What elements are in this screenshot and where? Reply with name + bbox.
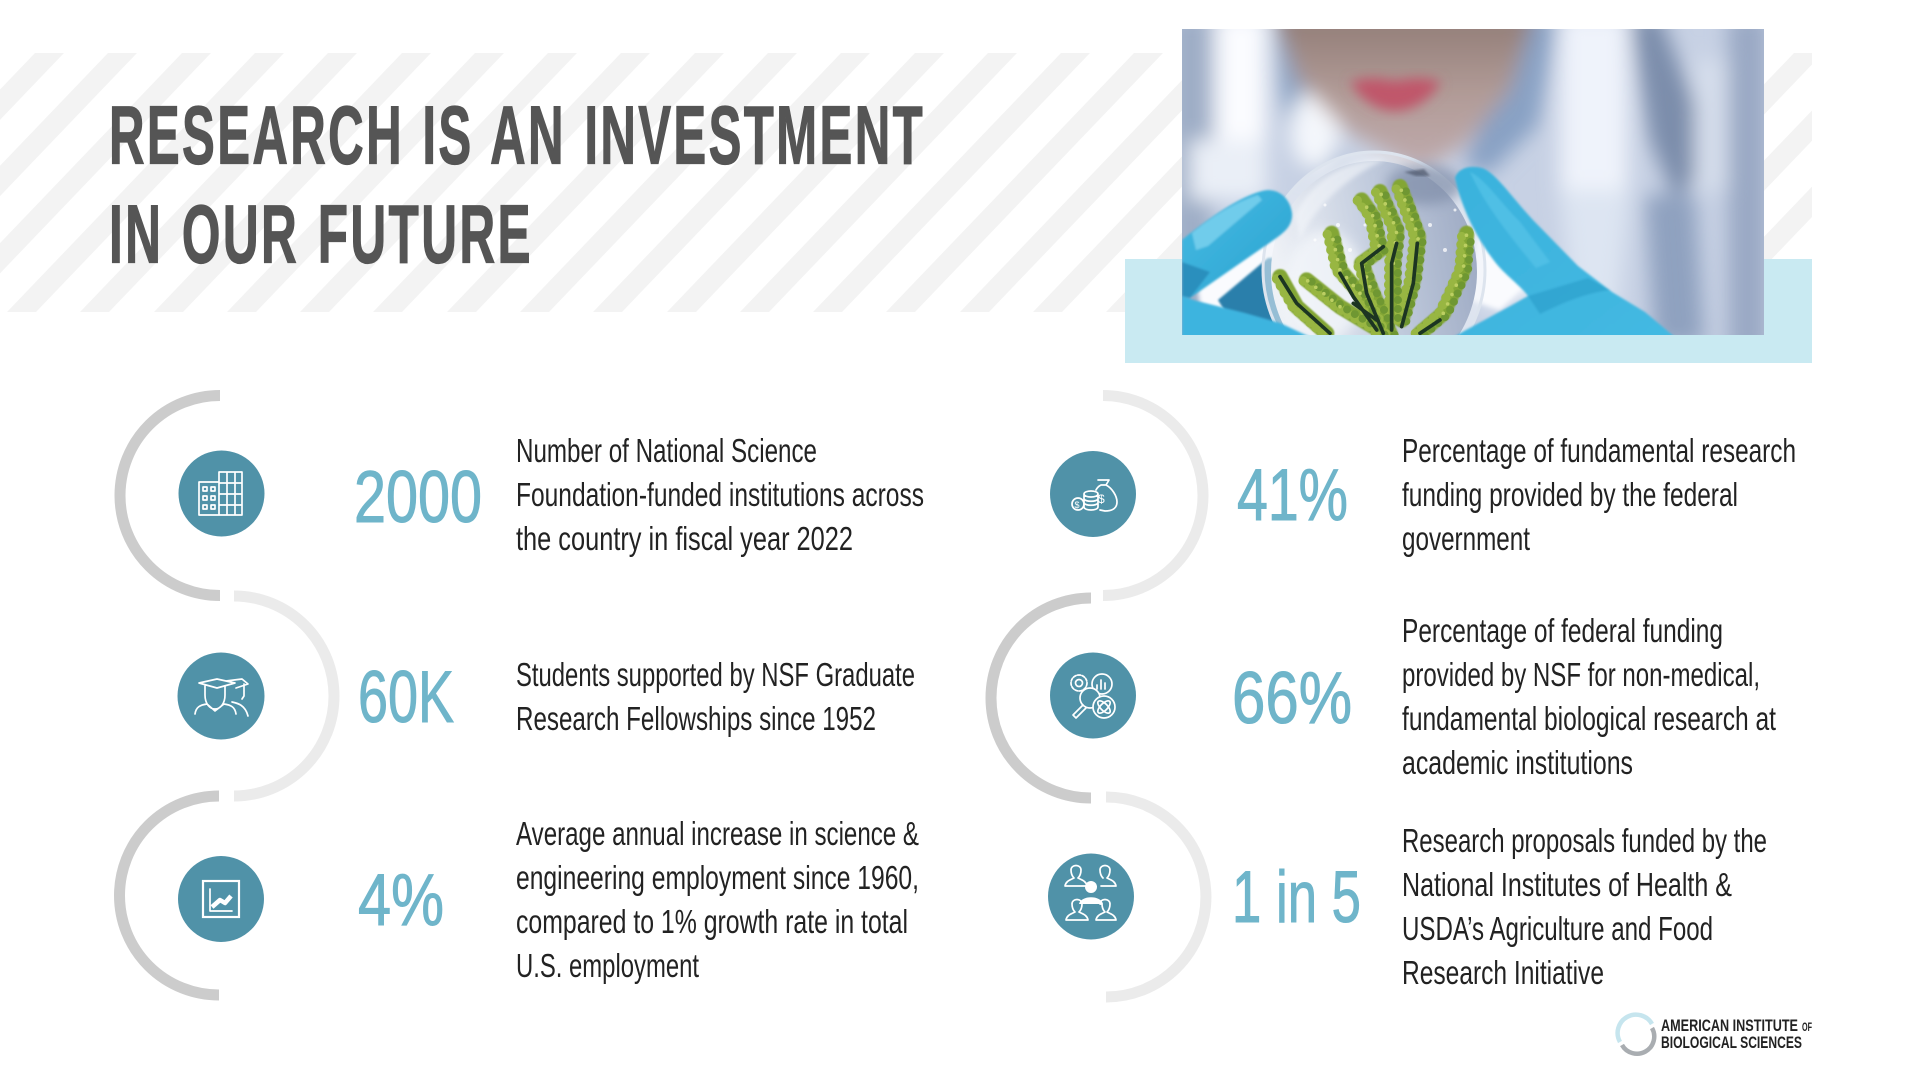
description: NSF share of biology funding: Percentage of federal funding bbox=[1402, 612, 1723, 649]
icon: growth chart bbox=[178, 856, 264, 942]
right glove bbox=[1452, 167, 1676, 338]
diagonal stripe banner bbox=[0, 53, 1920, 312]
description: NSF share of biology funding bbox=[1402, 612, 1776, 781]
logo: American Institute of Biological Sciences: AMERICAN INSTITUTE bbox=[1661, 1016, 1798, 1035]
description: employment growth: engineering employment since 1960, bbox=[516, 859, 919, 896]
logo: American Institute of Biological Sciences: BIOLOGICAL SCIENCES bbox=[1661, 1033, 1802, 1052]
icon: graduates bbox=[178, 652, 264, 740]
description: NSF share of biology funding: academic institutions bbox=[1402, 744, 1633, 781]
plant bbox=[1275, 187, 1471, 335]
description: NSF institutions: Number of National Science bbox=[516, 432, 817, 469]
lips bbox=[1350, 78, 1441, 111]
description: funded proposals: Research Initiative bbox=[1402, 954, 1604, 991]
icon: research gear chart magnifier atom bbox=[1050, 652, 1136, 738]
title: IN OUR FUTURE bbox=[109, 188, 533, 280]
description: funded proposals bbox=[1402, 822, 1767, 991]
title: RESEARCH IS AN INVESTMENT bbox=[109, 88, 925, 182]
description: NSF institutions bbox=[516, 432, 924, 557]
description: employment growth bbox=[516, 815, 919, 984]
connector arcs: right column bbox=[991, 396, 1206, 997]
description: graduate fellowships: Research Fellowships since 1952 bbox=[516, 700, 876, 737]
logo: American Institute of Biological Sciences bbox=[1618, 1015, 1812, 1054]
description: fundamental research funding: funding provided by the federal bbox=[1402, 476, 1738, 513]
description: fundamental research funding: Percentage of fundamental research bbox=[1402, 432, 1796, 469]
description: graduate fellowships bbox=[516, 656, 915, 737]
description: NSF share of biology funding: fundamental biological research at bbox=[1402, 700, 1776, 737]
description: employment growth: U.S. employment bbox=[516, 947, 699, 984]
logo: American Institute of Biological Sciences: OF bbox=[1802, 1020, 1812, 1034]
description: NSF share of biology funding: provided by NSF for non-medical, bbox=[1402, 656, 1760, 693]
icon: money bag and coins bbox=[1050, 451, 1136, 537]
white lab coat behind hands bbox=[1196, 238, 1520, 311]
photo: scientist holding petri dish with green plant bbox=[1182, 29, 1764, 335]
left glove bbox=[1182, 190, 1310, 337]
back of left hand bbox=[1216, 256, 1284, 326]
icon: team network bbox=[1048, 854, 1134, 940]
icon: buildings bbox=[178, 450, 264, 536]
description: NSF institutions: Foundation-funded institutions across bbox=[516, 476, 924, 513]
description: fundamental research funding: government bbox=[1402, 520, 1530, 557]
light blue band behind photo bbox=[1125, 259, 1812, 363]
icon: money bag and coins: $ bbox=[1098, 492, 1105, 506]
connector arcs: left column bbox=[119, 396, 334, 995]
description: NSF institutions: the country in fiscal year 2022 bbox=[516, 520, 853, 557]
icon: money bag and coins: $ bbox=[1074, 500, 1080, 510]
description: employment growth: Average annual increase in science & bbox=[516, 815, 919, 852]
stat: 4%: 4% bbox=[358, 860, 444, 941]
stat: 2000: 2000 bbox=[354, 457, 482, 538]
stat: 66%: 66% bbox=[1232, 658, 1352, 739]
description: fundamental research funding bbox=[1402, 432, 1796, 557]
title bbox=[109, 88, 925, 280]
description: funded proposals: National Institutes of Health & bbox=[1402, 866, 1732, 903]
description: funded proposals: Research proposals funded by the bbox=[1402, 822, 1767, 859]
stat: 41%: 41% bbox=[1237, 455, 1348, 536]
stat: 60K: 60K bbox=[358, 657, 454, 738]
description: employment growth: compared to 1% growth rate in total bbox=[516, 903, 908, 940]
description: graduate fellowships: Students supported by NSF Graduate bbox=[516, 656, 915, 693]
description: funded proposals: USDA’s Agriculture and Food bbox=[1402, 910, 1713, 947]
petri dish bbox=[1262, 150, 1486, 335]
stat: 1 in 5: 1 in 5 bbox=[1232, 857, 1361, 938]
